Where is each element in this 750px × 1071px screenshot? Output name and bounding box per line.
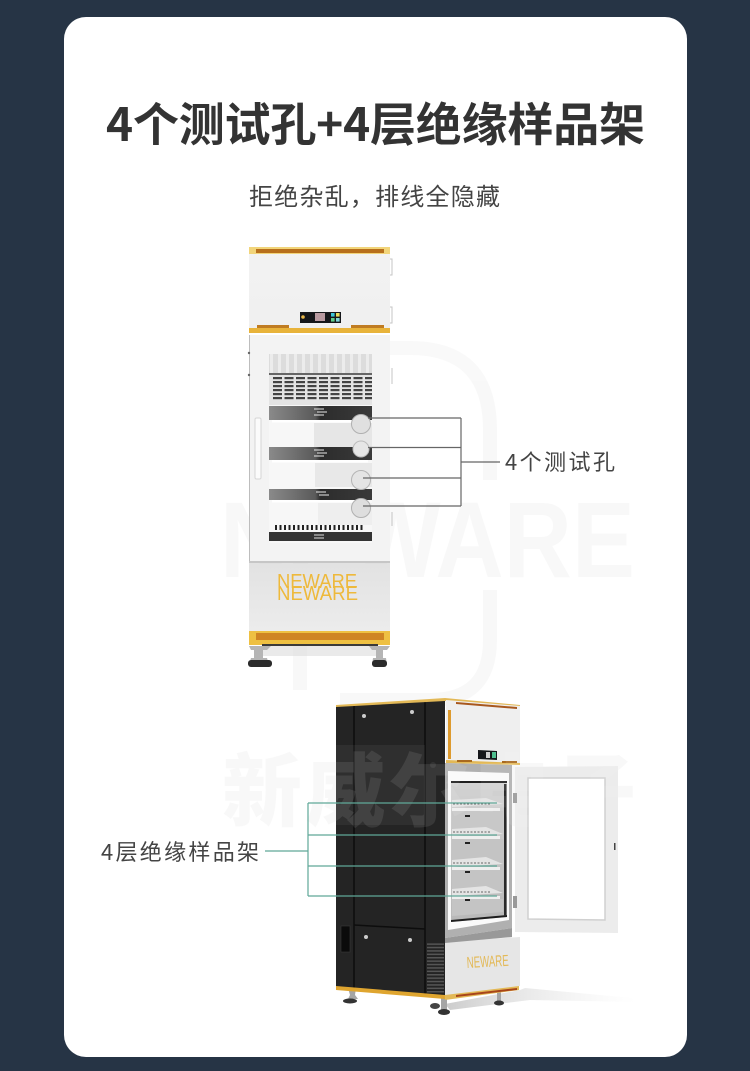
- control display: [300, 312, 341, 323]
- callout lines: 4 test ports: [363, 418, 500, 506]
- label: 4 insulated sample racks: 4层绝缘样品架: [101, 835, 259, 867]
- door frame body: [445, 763, 512, 938]
- label: 4 test ports: 4个测试孔: [505, 445, 615, 477]
- watermark over dark panel: 新威尔电子: [222, 728, 636, 844]
- white inner frame: [448, 771, 509, 930]
- shelf 4: [269, 532, 372, 541]
- top control box: [446, 700, 520, 765]
- shelf 3: [452, 857, 503, 867]
- front-view cabinet: [248, 247, 392, 667]
- black side panel: [336, 699, 445, 997]
- floor shadow: [262, 646, 378, 656]
- base panel with logo: NEWARE: [466, 953, 509, 972]
- casters: [343, 988, 504, 1015]
- callout lines: 4 insulated sample racks: [265, 803, 497, 896]
- top control box: [249, 247, 392, 333]
- open cabinet, angled view: [336, 698, 636, 1015]
- base panel with logo: NEWARE: [277, 571, 357, 593]
- base panel with logo: NEWARE: [277, 583, 358, 605]
- open glass door: [513, 766, 618, 933]
- casters: [248, 646, 390, 667]
- watermark: logo and brand: 新威尔电子: [222, 728, 636, 844]
- title: 4个测试孔+4层绝缘样品架: [106, 89, 645, 155]
- yellow top edge: [336, 698, 520, 707]
- shelf 1: [269, 406, 372, 420]
- shelf 2: [269, 447, 372, 460]
- yellow plinth: [249, 631, 390, 646]
- floor shadow: [445, 988, 636, 1010]
- watermark: logo and brand: [220, 348, 636, 844]
- control display: [478, 750, 497, 760]
- window interior: [269, 354, 372, 543]
- shelf 3: [269, 489, 372, 500]
- shelf 4: [452, 886, 503, 896]
- watermark: logo and brand: NEWARE: [220, 479, 635, 600]
- base panel with logo: [445, 928, 520, 996]
- shelf 2: [452, 827, 503, 836]
- base panel with logo: [249, 564, 390, 631]
- yellow plinth: [336, 986, 519, 1000]
- glass door: [248, 335, 392, 564]
- door handle: [255, 418, 261, 479]
- chamber interior with shelves: [451, 781, 507, 922]
- peg row: [276, 525, 362, 530]
- test-port circles: [352, 414, 370, 434]
- shelf 1: [452, 798, 503, 807]
- subtitle: 拒绝杂乱，排线全隐藏: [249, 177, 500, 212]
